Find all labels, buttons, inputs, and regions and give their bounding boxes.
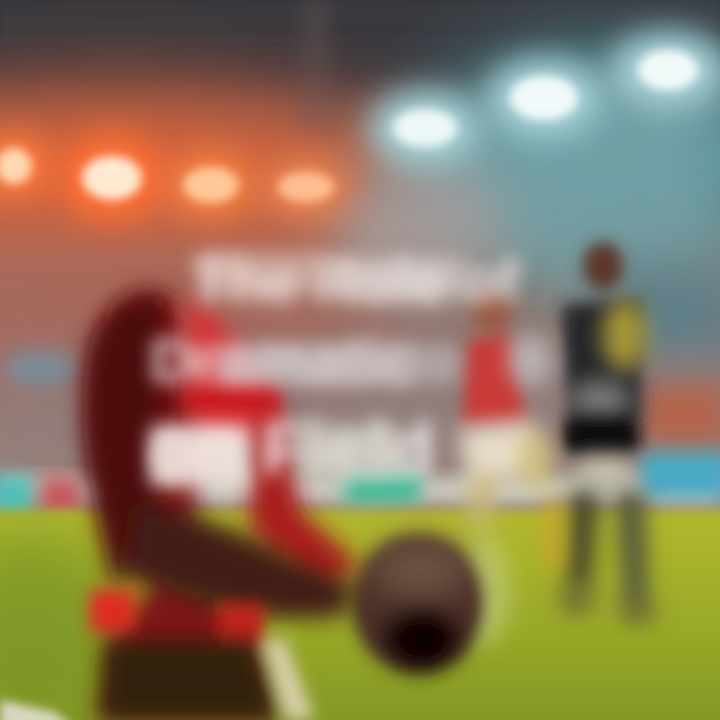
title text: The Role of	[192, 248, 520, 315]
title text: Dramatic	[150, 327, 415, 396]
player: red shirt midfield	[458, 292, 553, 530]
floodlights: orange row	[0, 134, 348, 222]
football	[352, 534, 510, 674]
group: players and ball with shared blur	[85, 242, 655, 720]
crowd and advertising boards	[0, 345, 720, 518]
floodlights: white-blue row	[369, 32, 720, 166]
foreground player: red and dark kit	[85, 290, 360, 720]
background: stadium sky	[0, 0, 720, 520]
title text	[150, 248, 520, 491]
title glow bars	[150, 252, 465, 487]
pitch	[0, 510, 720, 720]
title text: on Field	[150, 408, 434, 491]
player: dark kit with yellow sleeve	[545, 242, 655, 624]
